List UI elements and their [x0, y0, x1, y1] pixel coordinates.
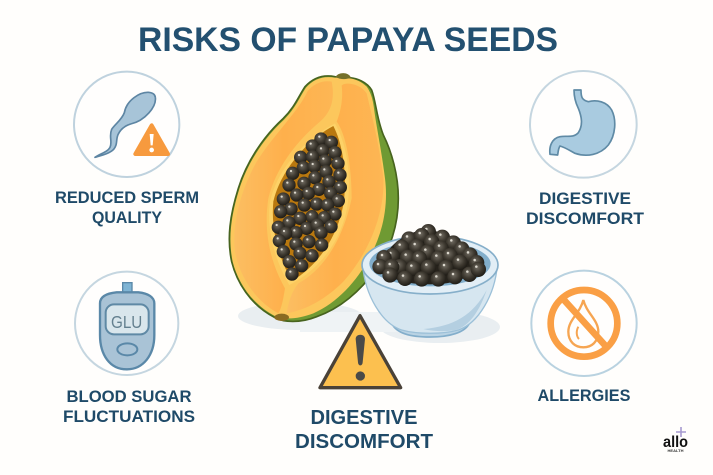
- bowl seeds: [372, 224, 486, 287]
- flesh rim: [230, 77, 386, 318]
- label: reduced sperm quality: REDUCED SPERM: [55, 189, 199, 207]
- bowl of seeds: [362, 224, 498, 337]
- cavity: [273, 126, 345, 281]
- label: blood sugar fluctuations: [63, 388, 195, 426]
- panel: blood sugar fluctuations: [63, 272, 195, 426]
- label: reduced sperm quality: [55, 189, 199, 227]
- cavity rim: [269, 123, 349, 285]
- panel: central warning: [295, 316, 433, 453]
- label: allergies: ALLERGIES: [538, 387, 630, 405]
- title: RISKS OF PAPAYA SEEDS: [138, 21, 558, 59]
- right lobe: [287, 84, 383, 313]
- left lobe: [234, 81, 333, 313]
- bowl body: [363, 265, 497, 333]
- bowl inside: [369, 241, 491, 286]
- label: digestive discomfort center: DISCOMFORT: [295, 431, 433, 453]
- logo: allo health: HEALTH: [668, 448, 684, 453]
- logo: allo health: [663, 427, 688, 453]
- logo: allo health: allo: [663, 434, 688, 451]
- papaya: [229, 73, 398, 321]
- blossom end: [274, 314, 289, 321]
- label: reduced sperm quality: QUALITY: [92, 209, 162, 227]
- bowl rim: [362, 236, 498, 294]
- seeds: [272, 132, 347, 281]
- icon: stomach: [530, 71, 637, 178]
- icon: glucose meter: [75, 272, 178, 375]
- label: digestive discomfort right: [526, 190, 644, 228]
- icon: glucose meter: GLU: [111, 312, 142, 332]
- label: digestive discomfort right: DIGESTIVE: [539, 190, 631, 208]
- icon: sperm with warning: [74, 72, 179, 177]
- label: digestive discomfort center: [295, 407, 433, 453]
- panel: allergies: [531, 271, 637, 405]
- label: digestive discomfort right: DISCOMFORT: [526, 210, 644, 228]
- skin: [229, 76, 398, 321]
- ground shadow: [238, 302, 500, 343]
- panel: digestive discomfort (right): [526, 71, 644, 228]
- label: digestive discomfort center: DIGESTIVE: [310, 407, 418, 429]
- bowl foot: [392, 323, 469, 337]
- label: blood sugar fluctuations: FLUCTUATIONS: [63, 408, 195, 426]
- label: blood sugar fluctuations: BLOOD SUGAR: [66, 388, 192, 406]
- panel: reduced sperm quality: [55, 72, 199, 227]
- icon: warning triangle: [320, 316, 401, 388]
- icon: no allergen drop: [531, 271, 637, 376]
- stem: [336, 73, 351, 79]
